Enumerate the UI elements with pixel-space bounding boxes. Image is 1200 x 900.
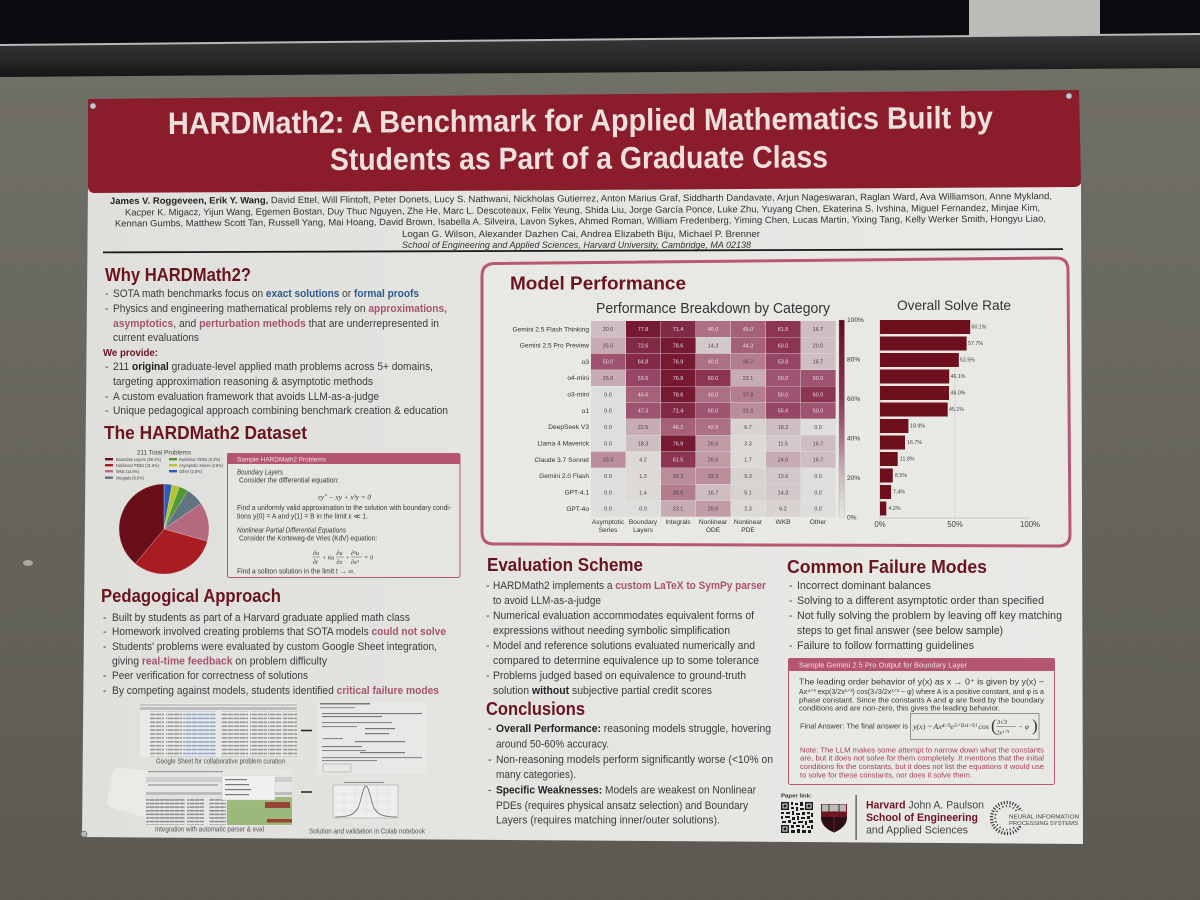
legend: Other (2.8%) xyxy=(179,469,202,474)
heatmap: 0.0 xyxy=(639,507,647,513)
heatmap: 33.3 xyxy=(673,474,683,480)
bar chart: overall solve rate: 100% xyxy=(1020,520,1040,529)
sample model output box: The leading order behavior of y(x) as x → 0⁺ is given by y(x) ~ xyxy=(799,678,1044,686)
sample problems box: Find a uniformly valid approximation to the solution with boundary condi- xyxy=(237,505,451,512)
panel: Common Failure Modes xyxy=(787,556,1062,784)
bullets: By competing against models, students identified critical failure modes xyxy=(112,685,439,697)
heatmap: 22.5 xyxy=(638,425,648,431)
bullets: - xyxy=(103,670,107,682)
heatmap: 50.0 xyxy=(778,392,788,398)
heatmap: 0.0 xyxy=(814,425,822,431)
sample problems box: ∂u xyxy=(336,550,343,557)
background: conference hall photo xyxy=(0,0,1200,60)
logo: Harvard SEAS wordmark xyxy=(866,800,984,836)
heatmap: 4.2 xyxy=(639,458,647,464)
sample model output box: Sample Gemini 2.5 Pro Output for Boundary Layer xyxy=(799,662,968,670)
heatmap: 71.4 xyxy=(673,327,683,333)
panel: Why HARDMath2 xyxy=(103,264,448,417)
heatmap: 45.0 xyxy=(743,327,753,333)
authors and affiliation: Kennan Gumbs, Matthew Scott Tan, Russell Yang, Mai Hoang, David Brown, Isabella A. Silveira, Lavon Sykes, Ahmed Roman, William Fredenberg, Yiming Chen, Lucas Martin, Yixing Tang, Kelly Werker Smith, Hongyu Liao, xyxy=(115,214,1046,228)
sample model output box: are, but it does not solve for them completely. It mentions that the initial xyxy=(800,754,1044,762)
bullets: 211 original graduate-level applied math problems across 5+ domains, xyxy=(113,361,433,373)
screenshot: parser integration sheet xyxy=(145,770,292,826)
caption: Google Sheet for collaborative problem curation xyxy=(156,756,285,766)
heatmap: 0.0 xyxy=(604,490,612,496)
heatmap: 44.6 xyxy=(638,392,648,398)
bullets: PDEs (requires physical ansatz selection) and Boundary xyxy=(496,800,749,812)
sample problems box: tions y(0) = A and y(1) = B in the limit ε ≪ 1. xyxy=(237,514,368,520)
white pillar xyxy=(969,0,1100,38)
bar chart: overall solve rate: 46.1% xyxy=(950,374,966,380)
pie chart xyxy=(119,484,209,574)
heatmap: 44.3 xyxy=(743,343,753,349)
heatmap: 76.9 xyxy=(673,441,683,447)
row labels: Gemini 2.0 Flash xyxy=(539,473,589,480)
bullets: - xyxy=(486,670,490,682)
screenshot: Google Sheet xyxy=(140,703,297,757)
title: Students as Part of a Graduate Class xyxy=(330,139,828,177)
heatmap: 16.7 xyxy=(813,441,823,447)
bullets: to avoid LLM-as-a-judge xyxy=(493,595,601,607)
bar chart: overall solve rate: 16.7% xyxy=(907,440,922,446)
heading: The HARDMath2 Dataset xyxy=(104,422,307,443)
bullets xyxy=(789,580,1062,652)
sample model output box: conditions fix the constants, but it does not list the equations it would use xyxy=(800,762,1044,771)
bullets xyxy=(488,723,773,826)
bar chart: overall solve rate: 11.8% xyxy=(900,456,915,462)
heatmap: 53.6 xyxy=(638,376,648,382)
authors and affiliation xyxy=(110,191,1052,250)
boxed final answer: 3√3 xyxy=(996,718,1008,726)
authors and affiliation: Logan G. Wilson, Alexander Dazhen Cai, Andrea Elizabeth Biju, Michael P. Brenner xyxy=(402,229,760,239)
bullets: expressions without needing symbolic simplification xyxy=(493,625,730,637)
sample problems box: + xyxy=(346,554,350,562)
row labels: o3 xyxy=(582,359,589,366)
sample problems box: ∂u xyxy=(313,550,319,557)
heatmap: 78.6 xyxy=(673,392,683,398)
column labels: ODE xyxy=(706,527,721,534)
bullets: asymptotics, and perturbation methods that are underrepresented in xyxy=(113,318,439,330)
heatmap: 72.6 xyxy=(638,343,648,349)
bar chart: overall solve rate: 52.5% xyxy=(960,358,975,364)
bullets xyxy=(486,580,766,697)
panel border xyxy=(482,258,1070,546)
colour scale xyxy=(839,317,864,522)
sample model output box: phase constant. Since the constants A and φ are fixed by the boundary xyxy=(799,698,1045,704)
pie title: 211 Total Problems xyxy=(137,450,191,456)
logo: Harvard SEAS wordmark: School of Engineering xyxy=(866,812,978,824)
bullets: - xyxy=(105,288,109,300)
heatmap: 0.0 xyxy=(604,474,612,480)
bar chart: overall solve rate: 4.2% xyxy=(888,506,901,512)
title banner xyxy=(88,90,1081,193)
heatmap: 1.3 xyxy=(639,474,647,480)
black board frame xyxy=(0,33,1200,77)
bullets: Specific Weaknesses: Models are weakest on Nonlinear xyxy=(496,784,756,796)
heatmap: 33.3 xyxy=(603,458,613,464)
boxed final answer: 2x¹ᐟ³ xyxy=(996,730,1010,736)
boxed final answer: ) xyxy=(1032,716,1038,735)
sample problems box: Consider the differential equation: xyxy=(239,478,339,484)
heatmap: 18.2 xyxy=(778,425,788,431)
bullets: Homework involved creating problems that SOTA models could not solve xyxy=(112,626,446,638)
column labels: Layers xyxy=(633,527,654,534)
logo: NeurIPS: NEURAL INFORMATION xyxy=(1009,814,1079,820)
sample model output box: conditions and are non-zero, this gives the leading behavior. xyxy=(799,706,1000,712)
column labels: Boundary xyxy=(629,519,658,526)
bar chart: overall solve rate: 8.5% xyxy=(895,473,907,479)
heatmap: 31.5 xyxy=(743,409,753,415)
bullets: steps to get final answer (see below sample) xyxy=(797,625,1003,637)
heatmap: 76.9 xyxy=(673,376,683,382)
footer: paper link and logos xyxy=(781,794,1081,840)
heatmap: 11.5 xyxy=(778,441,788,447)
bullets: Failure to follow formatting guidelines xyxy=(797,640,974,652)
bullets: solution without subjective partial credit scores xyxy=(493,685,712,697)
heatmap: 77.8 xyxy=(638,327,648,333)
logo: NeurIPS: PROCESSING SYSTEMS xyxy=(1009,821,1078,827)
bullets: - xyxy=(103,685,107,697)
heatmap: 61.5 xyxy=(673,458,683,464)
panel: Evaluation Scheme xyxy=(486,554,766,697)
logo: NeurIPS xyxy=(992,802,1081,834)
legend: Nonlinear ODEs (3.3%) xyxy=(179,457,220,462)
heatmap: 18.3 xyxy=(638,441,648,447)
heatmap: 1.7 xyxy=(744,458,752,464)
sample model output box: Final Answer: The final answer is xyxy=(800,724,909,730)
row labels: Llama 4 Maverick xyxy=(537,440,590,448)
heatmap: 28.6 xyxy=(708,441,718,447)
heatmap: 46.2 xyxy=(673,425,683,431)
row labels xyxy=(513,326,590,513)
heatmap: 60.0 xyxy=(813,392,823,398)
sample problems box xyxy=(227,453,460,578)
heatmap: 37.8 xyxy=(743,392,753,398)
heading: Evaluation Scheme xyxy=(487,554,643,575)
boxed final answer: ( xyxy=(991,716,997,735)
sample problems box: Nonlinear Partial Differential Equations xyxy=(237,528,347,534)
sample problems box: + 6u xyxy=(322,554,334,562)
bullets: compared to determine equivalence up to some tolerance xyxy=(493,655,759,667)
authors and affiliation: Kacper K. Migacz, Yijun Wang, Egemen Bostan, Duy Thuc Nguyen, Zhe He, Marc L. Descoteaux, Felix Yeung, Shida Liu, Jorge García Ponce, Luke Zhu, Yuyang Chen, Ekaterina S. Ivshina, Miguel Fernandez, Minjae Kim, xyxy=(125,203,1040,217)
heatmap xyxy=(513,321,836,534)
heatmap: 20.0 xyxy=(813,343,823,349)
heatmap: 2.3 xyxy=(744,507,752,513)
bullets: Model and reference solutions evaluated numerically and xyxy=(493,640,755,652)
row labels: GPT-4o xyxy=(566,506,589,513)
heading: Model Performance xyxy=(510,272,686,294)
heatmap: 0.0 xyxy=(814,507,822,513)
pushpin mark on board xyxy=(23,560,33,566)
bullets: - xyxy=(105,391,109,403)
footer: paper link and logos: Paper link: xyxy=(781,794,812,800)
colour scale: 100% xyxy=(847,317,864,324)
colour scale: 40% xyxy=(847,436,860,442)
heatmap: 40.0 xyxy=(708,392,718,398)
plot in Colab notebook xyxy=(333,782,398,818)
sample model output box: to solve for these constants, nor does it solve them. xyxy=(800,770,972,780)
heatmap: 71.4 xyxy=(673,409,683,415)
bullets: SOTA math benchmarks focus on exact solutions or formal proofs xyxy=(113,288,419,300)
heatmap: 35.7 xyxy=(743,360,753,366)
bullets: A custom evaluation framework that avoids LLM-as-a-judge xyxy=(113,391,379,403)
column labels: Nonlinear xyxy=(699,519,728,526)
heatmap: 16.7 xyxy=(813,458,823,464)
column labels: PDE xyxy=(741,527,755,534)
sample model output box xyxy=(788,658,1055,784)
bar chart: overall solve rate: 7.4% xyxy=(893,490,905,496)
heatmap: 60.0 xyxy=(708,376,718,382)
heatmap: 78.6 xyxy=(673,343,683,349)
screenshot: Colab notebook xyxy=(317,702,427,774)
heatmap: 0.0 xyxy=(604,425,612,431)
bullets: - xyxy=(488,784,492,796)
sample problems box: εy″ − xy + x³y = 0 xyxy=(318,494,371,502)
heatmap: 50.0 xyxy=(603,360,613,366)
bullets: - xyxy=(789,640,793,652)
caption: Integration with automatic parser & eval xyxy=(155,824,264,834)
heatmap: 28.6 xyxy=(708,458,718,464)
heatmap: 3.3 xyxy=(744,441,752,447)
heading: Pedagogical Approach xyxy=(101,585,281,606)
bullets: HARDMath2 implements a custom LaTeX to SymPy parser xyxy=(493,580,766,592)
heatmap: 33.3 xyxy=(708,474,718,480)
panel: Model Performance xyxy=(482,258,1070,546)
heatmap: 47.3 xyxy=(638,409,648,415)
bullets: - xyxy=(105,361,109,373)
heatmap: 14.3 xyxy=(708,343,718,349)
row labels: o3-mini xyxy=(567,392,590,398)
legend: Boundary Layers (39.1%) xyxy=(116,457,161,462)
heatmap: 23.1 xyxy=(743,376,753,382)
row labels: DeepSeek V3 xyxy=(548,424,589,431)
legend: Nonlinear PDEs (31.6%) xyxy=(116,463,159,468)
heatmap: 50.0 xyxy=(778,376,788,382)
sample problems box: ∂t xyxy=(313,559,318,566)
bullets: around 50-60% accuracy. xyxy=(496,738,609,750)
heatmap: 55.6 xyxy=(778,409,788,415)
bullets xyxy=(103,288,448,417)
bar chart: overall solve rate: 45.1% xyxy=(949,407,964,413)
heatmap: 23.1 xyxy=(673,507,683,513)
sample problems box: = 0 xyxy=(364,554,374,562)
colour scale: 0% xyxy=(847,514,857,522)
icon: Harvard shield xyxy=(821,804,847,832)
column labels: Series xyxy=(599,527,618,534)
legend: Integrals (6.5%) xyxy=(116,476,144,480)
heatmap: 0.0 xyxy=(604,392,612,398)
authors and affiliation: James V. Roggeveen, Erik Y. Wang, David Ettel, Will Flintoft, Peter Donets, Lucy S. Nathwani, Nickholas Gutierrez, Anton Marius Graf, Siddharth Dandavate, Arjun Nageswaran, Raglan Ward, Ava Williamson, Anne Mykland, xyxy=(110,191,1052,206)
bullets: Physics and engineering mathematical problems rely on approximations, xyxy=(113,303,447,315)
column labels: Nonlinear xyxy=(734,519,763,526)
logo: Harvard SEAS wordmark: Harvard John A. Paulson xyxy=(866,800,984,812)
boxed final answer: y(x) ~ Ax⁴ᐟ³e³ᐟ⁽²ˣ¹ᐟ³⁾ cos xyxy=(912,722,989,731)
sample problems box: Boundary Layers xyxy=(237,470,283,476)
bullets: - xyxy=(488,723,492,735)
heatmap title: Performance Breakdown by Category xyxy=(596,301,831,317)
heatmap: 40.0 xyxy=(708,327,718,333)
heatmap: 38.5 xyxy=(673,490,683,496)
bullets: Numerical evaluation accommodates equivalent forms of xyxy=(493,610,754,622)
heatmap: 16.7 xyxy=(813,327,823,333)
legend: Asymptotic Series (2.8%) xyxy=(179,463,223,468)
sample model output box: Ax⁴ᐟ³ exp(3/2x¹ᐟ³) cos(3√3/2x¹ᐟ³ − φ) where A is a positive constant, and φ is a xyxy=(799,688,1044,696)
panel: dataset xyxy=(104,422,460,578)
heatmap: 42.9 xyxy=(708,425,718,431)
chart title: Overall Solve Rate xyxy=(897,297,1011,313)
sticker residue xyxy=(107,768,160,822)
row labels: Gemini 2.5 Flash Thinking xyxy=(513,326,589,334)
bullets: - xyxy=(105,405,109,417)
heatmap: 28.6 xyxy=(708,507,718,513)
heatmap: 0.0 xyxy=(604,409,612,415)
heading: Why HARDMath2? xyxy=(105,264,251,285)
legend: WKB (14.0%) xyxy=(116,469,139,474)
heatmap: 60.0 xyxy=(778,343,788,349)
bar chart: overall solve rate: 0% xyxy=(874,520,886,529)
heatmap: 13.6 xyxy=(778,474,788,480)
bullets: - xyxy=(105,303,109,315)
bullets: Incorrect dominant balances xyxy=(797,580,931,592)
row labels: o1 xyxy=(582,408,589,415)
bullets: - xyxy=(103,612,107,624)
legend xyxy=(105,457,223,480)
sample problems box: ∂x³ xyxy=(351,559,359,566)
row labels: o4-mini xyxy=(567,375,590,382)
bullets: - xyxy=(103,626,107,638)
heatmap: 76.9 xyxy=(673,360,683,366)
sample problems box: ∂³u xyxy=(351,550,359,557)
boxed final answer xyxy=(910,714,1039,740)
heatmap: 14.3 xyxy=(778,490,788,496)
heatmap: 0.0 xyxy=(814,474,822,480)
bullets: Overall Performance: reasoning models struggle, hovering xyxy=(496,723,771,735)
column labels: WKB xyxy=(775,519,791,526)
bullets: Peer verification for correctness of solutions xyxy=(112,670,308,682)
bullets: - xyxy=(488,754,492,766)
panel: Pedagogical Approach xyxy=(101,585,446,836)
bullets: current evaluations xyxy=(113,332,199,344)
row labels: GPT-4.1 xyxy=(564,490,589,496)
heatmap: 53.8 xyxy=(778,360,788,366)
sample problems box: Sample HARDMath2 Problems xyxy=(237,456,327,464)
bullets: Problems judged based on equivalence to ground-truth xyxy=(493,670,746,682)
bullets: Unique pedagogical approach combining benchmark creation & education xyxy=(113,405,448,417)
title: HARDMath2: A Benchmark for Applied Mathematics Built by xyxy=(168,100,994,141)
bar chart: overall solve rate: 57.7% xyxy=(968,341,983,347)
bullets: - xyxy=(789,580,793,592)
poster sheet xyxy=(82,184,1083,844)
sample problems box: Find a soliton solution in the limit t → ∞. xyxy=(237,568,355,576)
bullets: We provide: xyxy=(103,348,158,359)
heatmap: 16.7 xyxy=(708,490,718,496)
column labels: Asymptotic xyxy=(592,519,625,526)
heatmap: 6.2 xyxy=(779,507,787,513)
heatmap: 50.0 xyxy=(813,409,823,415)
note text: Note: The LLM makes some attempt to narrow down what the constants xyxy=(800,746,1044,754)
column labels: Integrals xyxy=(665,519,691,526)
bullets: Solving to a different asymptotic order than specified xyxy=(797,595,1044,607)
bullets: Built by students as part of a Harvard graduate applied math class xyxy=(112,612,410,624)
bullets: many categories). xyxy=(496,769,576,781)
heatmap: 50.0 xyxy=(813,376,823,382)
colour scale: 60% xyxy=(847,396,860,403)
heatmap: 0.0 xyxy=(814,490,822,496)
bullets: Layers (requires matching inner/outer solutions). xyxy=(496,814,720,826)
heatmap: 25.0 xyxy=(603,343,613,349)
heatmap: 0.0 xyxy=(604,507,612,513)
bullets: Not fully solving the problem by leaving off key matching xyxy=(797,610,1062,622)
title xyxy=(168,100,994,177)
icon: QR code xyxy=(781,802,813,833)
heatmap: 24.0 xyxy=(778,458,788,464)
row labels: Claude 3.7 Sonnet xyxy=(534,457,589,464)
bullets: - xyxy=(103,641,107,653)
bar chart: overall solve rate: 50% xyxy=(947,520,963,529)
heatmap: 6.7 xyxy=(744,425,752,431)
caption: Solution and validation in Colab notebook xyxy=(309,826,425,836)
heatmap: 16.7 xyxy=(813,360,823,366)
arrow left xyxy=(301,791,312,793)
bullets: targeting approximation reasoning & asymptotic methods xyxy=(113,376,373,388)
column labels xyxy=(592,519,827,534)
boxed final answer: − φ xyxy=(1018,722,1029,731)
heatmap: 9.3 xyxy=(744,474,752,480)
panel: Conclusions xyxy=(486,698,773,826)
bar chart: overall solve rate xyxy=(874,297,1040,529)
bullets xyxy=(103,612,446,697)
authors and affiliation: School of Engineering and Applied Sciences, Harvard University, Cambridge, MA 02138 xyxy=(402,240,752,250)
heatmap: 20.0 xyxy=(603,327,613,333)
heatmap: 64.8 xyxy=(638,360,648,366)
bullets: Students' problems were evaluated by custom Google Sheet integration, xyxy=(112,641,437,653)
arrow right xyxy=(301,730,312,732)
colour scale: 80% xyxy=(847,356,860,364)
bar chart: overall solve rate: 18.9% xyxy=(910,424,925,430)
colour scale: 20% xyxy=(847,475,860,482)
bullets: Non-reasoning models perform significantly worse (<10% on xyxy=(496,754,773,766)
heatmap: 25.0 xyxy=(603,376,613,382)
heatmap: 0.0 xyxy=(604,441,612,447)
bullets: - xyxy=(789,595,793,607)
column labels: Other xyxy=(810,519,827,526)
heatmap: 50.0 xyxy=(708,409,718,415)
bullets: - xyxy=(486,580,490,592)
heatmap: 5.1 xyxy=(744,490,752,496)
heatmap: 40.0 xyxy=(708,360,718,366)
bullets: - xyxy=(486,610,490,622)
pins xyxy=(81,93,1072,837)
heatmap: 1.4 xyxy=(639,490,647,496)
logo: Harvard SEAS wordmark: and Applied Sciences xyxy=(866,824,969,836)
sample problems box: ∂x xyxy=(336,559,343,566)
heatmap: 61.5 xyxy=(778,327,788,333)
bar chart: overall solve rate: 46.0% xyxy=(950,390,966,396)
bullets: - xyxy=(789,610,793,622)
row labels: Gemini 2.5 Pro Preview xyxy=(520,342,589,350)
heading: Conclusions xyxy=(486,698,585,719)
heading: Common Failure Modes xyxy=(787,556,987,577)
bullets: giving real-time feedback on problem difficulty xyxy=(112,656,328,668)
bar chart: overall solve rate: 60.1% xyxy=(972,324,987,330)
bullets: - xyxy=(486,640,490,652)
sample problems box: Consider the Korteweg-de Vries (KdV) equation: xyxy=(239,536,377,542)
